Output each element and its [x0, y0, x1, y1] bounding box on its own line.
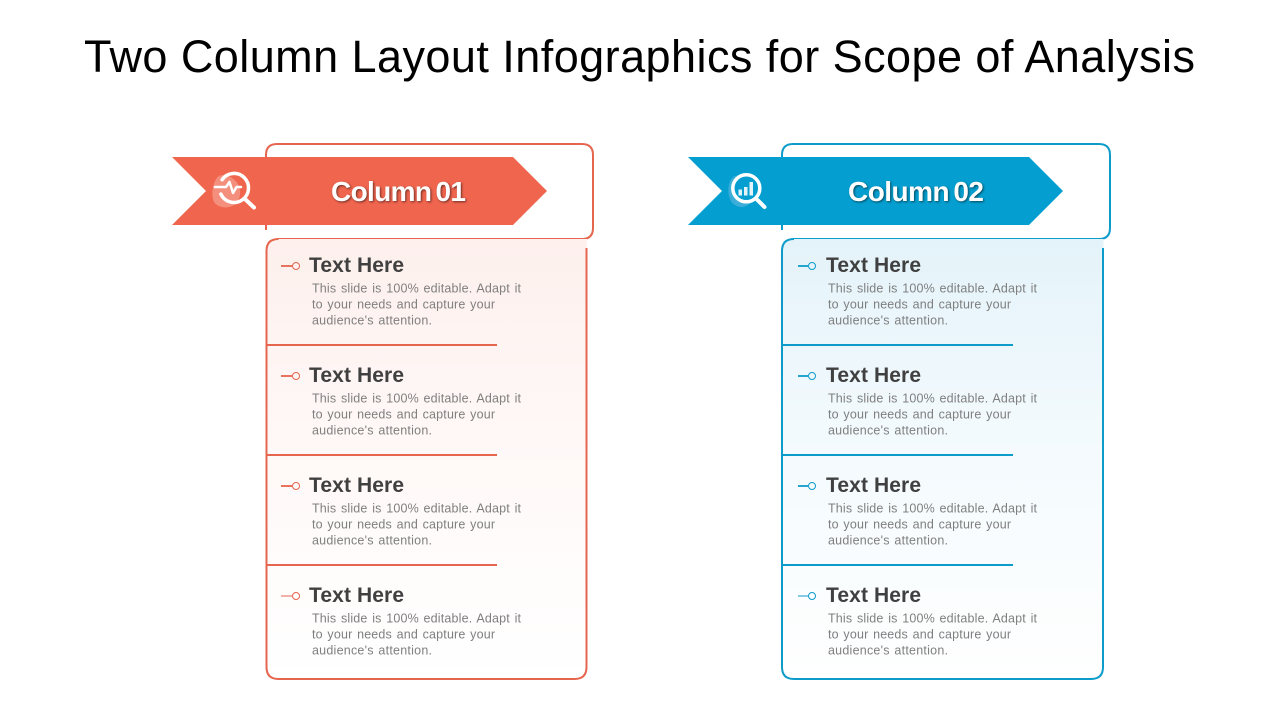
- item body: This slide is 100% editable. Adapt it: [312, 392, 522, 406]
- item 4: [281, 584, 522, 658]
- item body: audience's attention.: [312, 424, 432, 438]
- item body: This slide is 100% editable. Adapt it: [312, 282, 522, 296]
- column 02 header outline: [782, 144, 1110, 239]
- item body: audience's attention.: [312, 534, 432, 548]
- connector marker: [281, 482, 300, 490]
- item body: audience's attention.: [828, 534, 948, 548]
- item body: to your needs and capture your: [312, 628, 495, 642]
- item body: to your needs and capture your: [312, 408, 495, 422]
- connector marker: [798, 592, 816, 600]
- item 2: [798, 364, 1038, 438]
- column 01 list panel: [266, 239, 587, 679]
- panel: column 02: [688, 144, 1110, 679]
- icon: magnifier with bar chart: [728, 175, 764, 207]
- column 01 header outline: [266, 144, 593, 239]
- item 3: [798, 474, 1038, 548]
- item heading: Text Here: [309, 584, 404, 607]
- item 3: [281, 474, 522, 548]
- column 01 ribbon: [172, 157, 547, 225]
- item heading: Text Here: [826, 254, 921, 277]
- item heading: Text Here: [309, 364, 404, 387]
- item body: This slide is 100% editable. Adapt it: [828, 282, 1038, 296]
- item body: audience's attention.: [312, 314, 432, 328]
- item heading: Text Here: [826, 474, 921, 497]
- item body: to your needs and capture your: [828, 518, 1011, 532]
- item body: audience's attention.: [828, 314, 948, 328]
- item 1: [798, 254, 1038, 328]
- item heading: Text Here: [309, 254, 404, 277]
- panel: column 01: [172, 144, 593, 679]
- connector marker: [798, 372, 816, 380]
- item heading: Text Here: [309, 474, 404, 497]
- item body: to your needs and capture your: [828, 628, 1011, 642]
- item body: This slide is 100% editable. Adapt it: [312, 612, 522, 626]
- item body: to your needs and capture your: [312, 518, 495, 532]
- connector marker: [798, 482, 816, 490]
- item body: to your needs and capture your: [828, 408, 1011, 422]
- item 4: [798, 584, 1038, 658]
- item body: This slide is 100% editable. Adapt it: [828, 392, 1038, 406]
- connector marker: [798, 262, 816, 270]
- connector marker: [281, 372, 300, 380]
- column 02 ribbon: [688, 157, 1063, 225]
- item body: audience's attention.: [828, 424, 948, 438]
- item 1: [281, 254, 522, 328]
- item body: audience's attention.: [312, 644, 432, 658]
- item heading: Text Here: [826, 364, 921, 387]
- connector marker: [281, 262, 300, 270]
- connector marker: [281, 592, 300, 600]
- column 02 heading: Column 02: [848, 176, 984, 207]
- title: Two Column Layout Infographics for Scope of Analysis: [84, 31, 1195, 82]
- item 2: [281, 364, 522, 438]
- item body: This slide is 100% editable. Adapt it: [312, 502, 522, 516]
- icon: magnifier with pulse: [212, 173, 254, 208]
- item body: This slide is 100% editable. Adapt it: [828, 502, 1038, 516]
- item body: audience's attention.: [828, 644, 948, 658]
- item body: This slide is 100% editable. Adapt it: [828, 612, 1038, 626]
- column 01 heading: Column 01: [331, 176, 466, 207]
- column 02 list panel: [782, 239, 1104, 679]
- item body: to your needs and capture your: [828, 298, 1011, 312]
- item heading: Text Here: [826, 584, 921, 607]
- item body: to your needs and capture your: [312, 298, 495, 312]
